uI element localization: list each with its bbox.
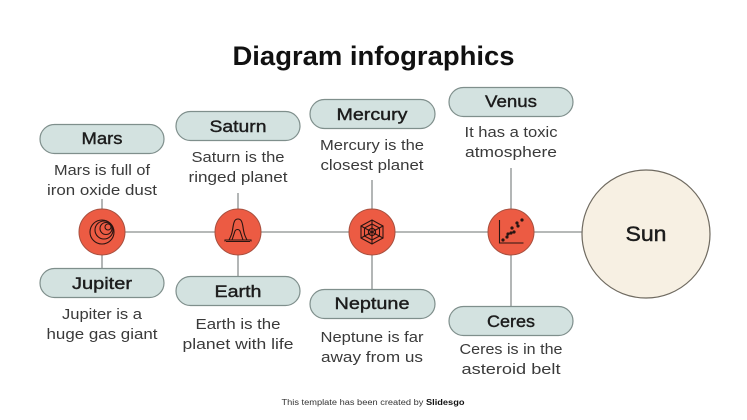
icon: bell curve — [215, 209, 261, 255]
icon: concentric spiral — [79, 209, 125, 255]
ceres description — [460, 341, 562, 378]
mercury label: Mercury — [336, 105, 408, 124]
ceres label: Ceres — [487, 312, 535, 331]
jupiter description — [46, 306, 158, 343]
sun: Sun — [626, 223, 666, 246]
venus group — [449, 88, 573, 255]
mars description: Mars is full of — [54, 162, 151, 179]
jupiter description: huge gas giant — [46, 326, 158, 343]
mercury group — [310, 100, 435, 255]
mars description: iron oxide dust — [47, 182, 158, 199]
ceres description: Ceres is in the — [460, 341, 562, 358]
jupiter description: Jupiter is a — [62, 306, 143, 323]
icon: radar web — [349, 209, 395, 255]
saturn description: ringed planet — [188, 169, 288, 186]
neptune group — [310, 290, 435, 366]
ceres group — [449, 306, 573, 378]
neptune description: away from us — [321, 349, 423, 366]
ceres description: asteroid belt — [462, 361, 562, 378]
earth label: Earth — [214, 282, 262, 301]
title: Diagram infographics — [232, 41, 514, 71]
jupiter group — [40, 268, 164, 343]
neptune description: Neptune is far — [320, 329, 424, 346]
mars description — [47, 162, 158, 199]
earth description: Earth is the — [196, 316, 280, 333]
mercury description: Mercury is the — [320, 137, 424, 154]
mercury label — [310, 100, 435, 128]
venus description — [464, 124, 558, 161]
venus description: It has a toxic — [464, 124, 558, 141]
saturn group — [176, 112, 300, 255]
mercury description: closest planet — [320, 157, 424, 174]
earth group — [176, 276, 300, 353]
saturn label: Saturn — [210, 117, 266, 136]
mercury description — [320, 137, 424, 174]
jupiter label: Jupiter — [72, 274, 132, 293]
saturn label — [176, 112, 300, 140]
venus label — [449, 88, 573, 116]
saturn description: Saturn is the — [192, 149, 284, 166]
earth description — [182, 316, 294, 353]
venus description: atmosphere — [465, 144, 557, 161]
venus label: Venus — [485, 92, 537, 111]
sun — [582, 170, 710, 298]
earth description: planet with life — [182, 336, 294, 353]
mars label: Mars — [82, 129, 122, 148]
connector lines — [102, 168, 585, 307]
neptune label: Neptune — [334, 294, 410, 313]
icon: scatter plot — [488, 209, 534, 255]
footer credit: This template has been created by Slidesgo — [282, 398, 465, 407]
saturn description — [188, 149, 288, 186]
neptune description — [320, 329, 424, 366]
mars group — [40, 124, 164, 255]
